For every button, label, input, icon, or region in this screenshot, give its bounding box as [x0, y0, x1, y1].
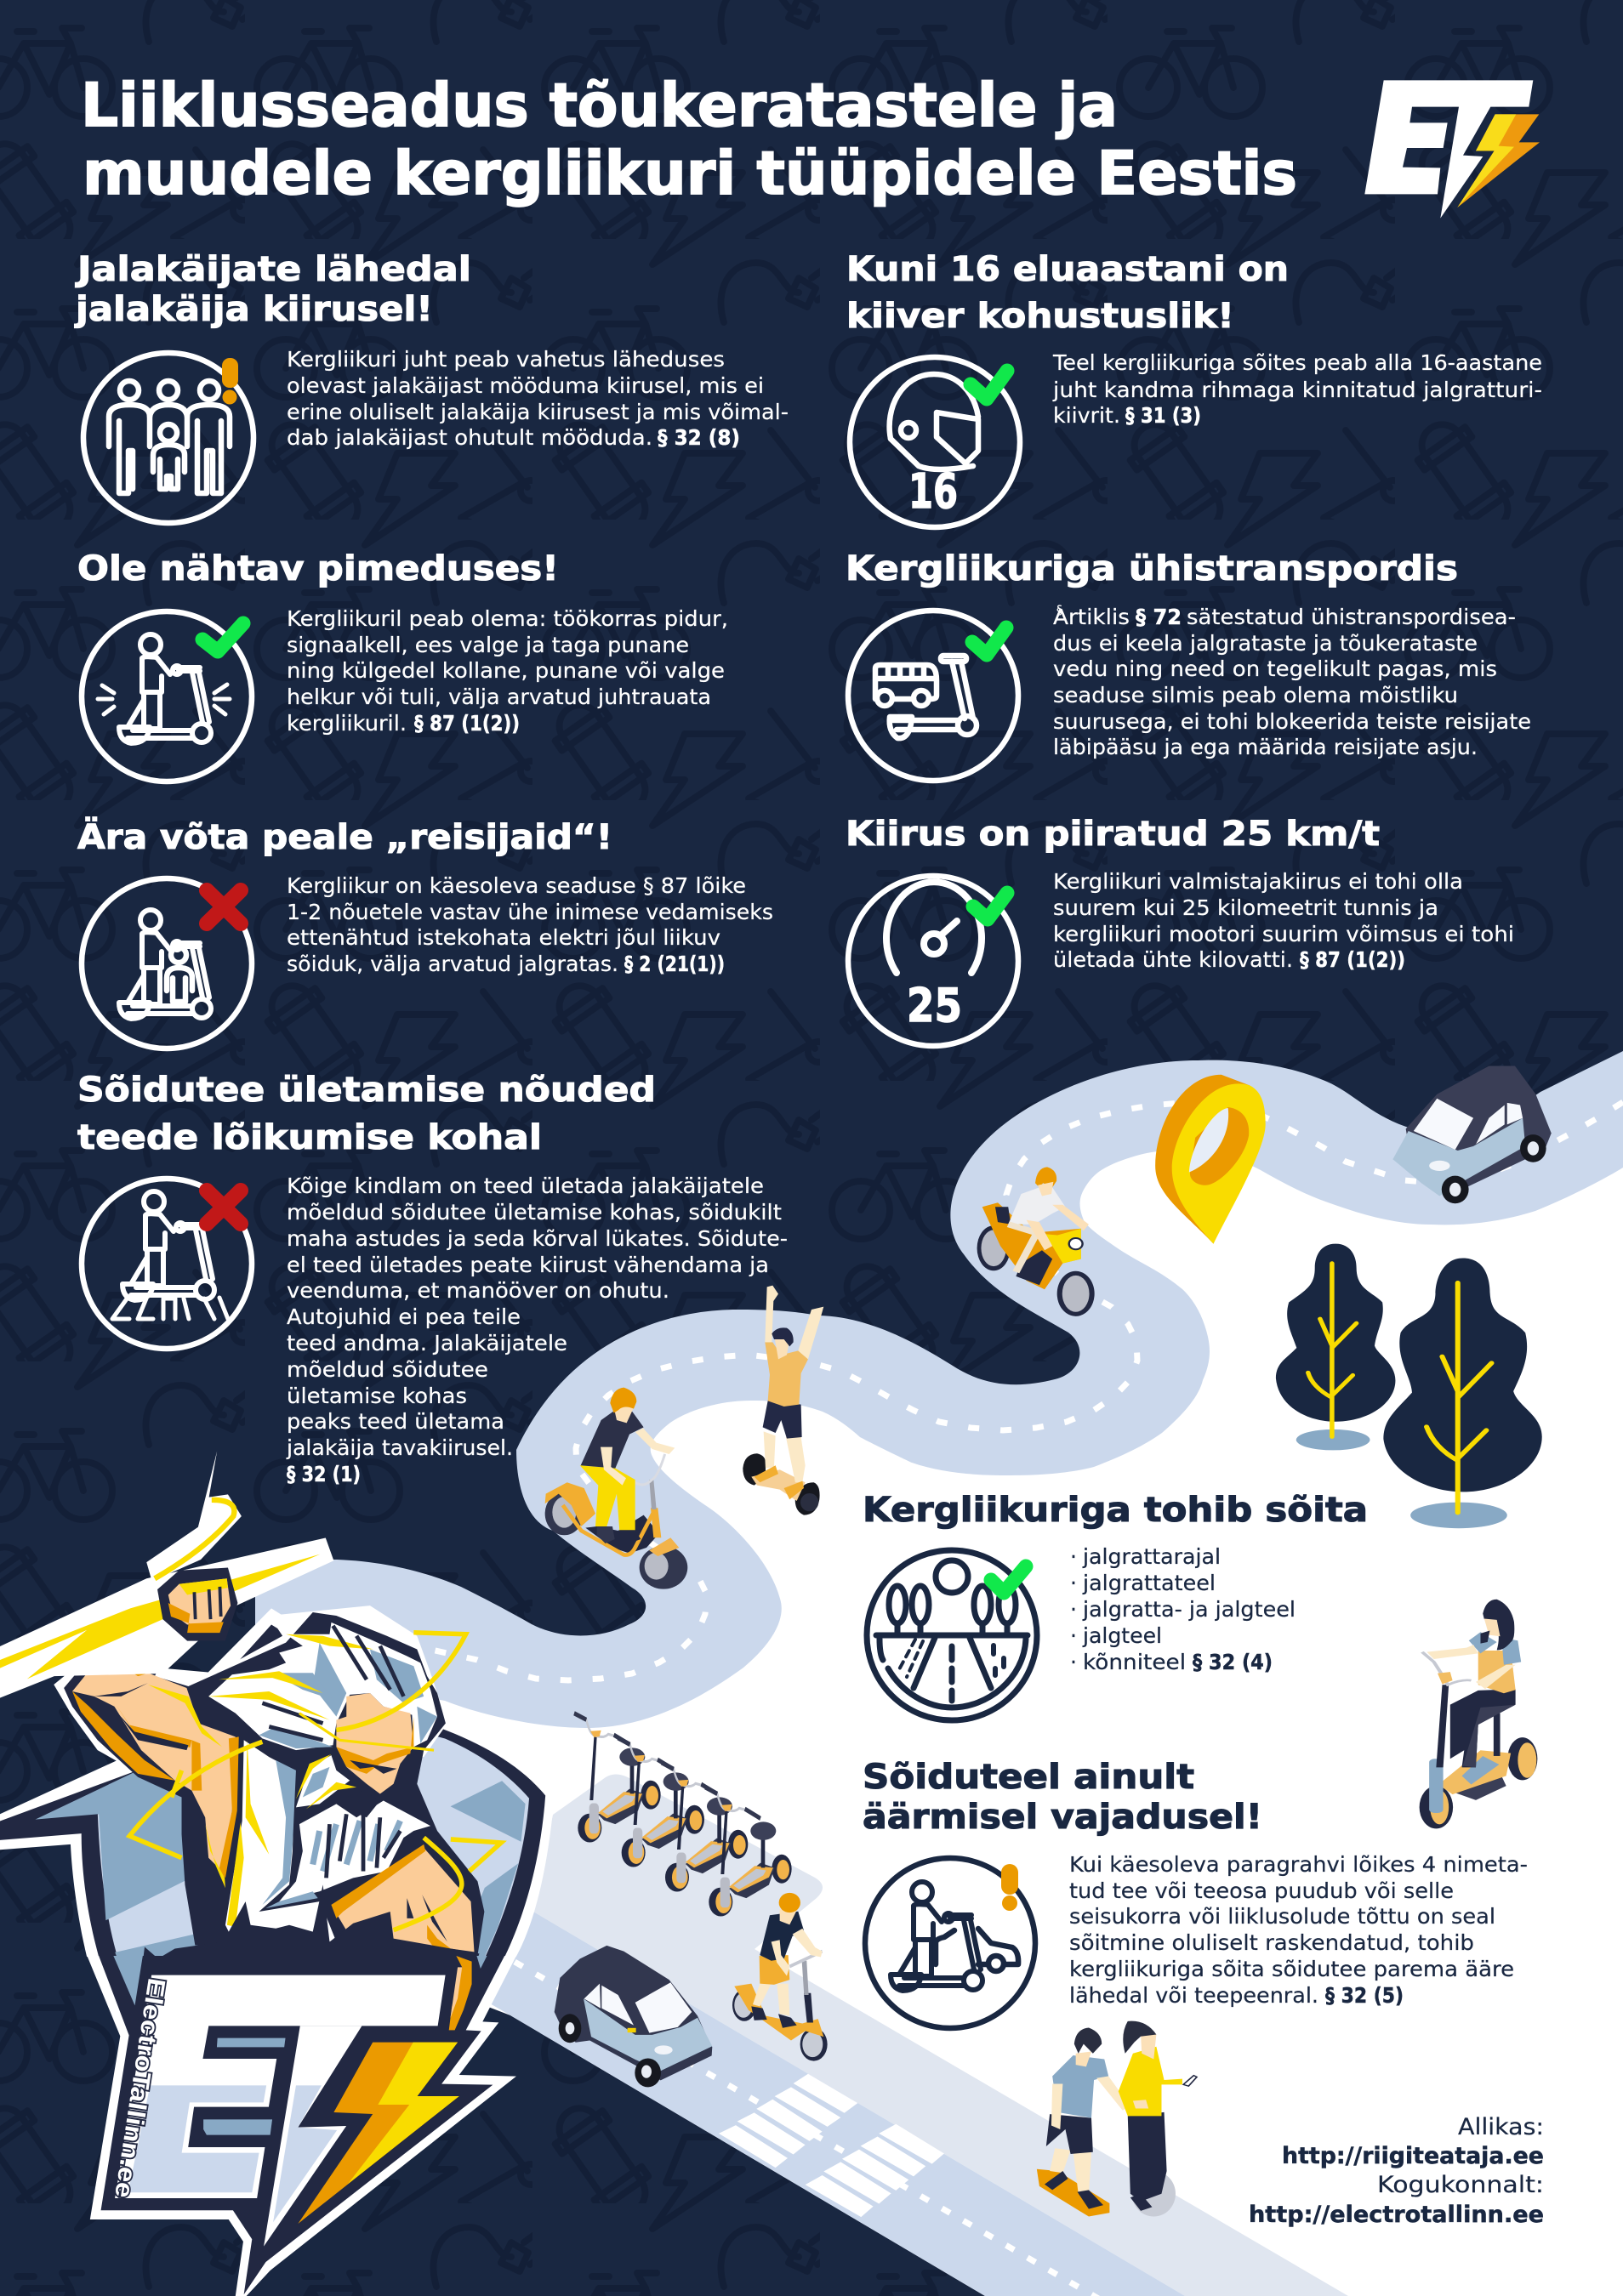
mascot: ET letters and bolt — [87, 1956, 516, 2296]
text block: sõitmine oluliselt raskendatud, tohib — [1069, 1930, 1474, 1955]
text block: Kergliikuri valmistajakiirus ei tohi olla — [1053, 869, 1463, 894]
heading — [863, 1758, 1262, 1837]
heading: Kuni 16 eluaastani on — [846, 250, 1289, 289]
illustration: top car — [1392, 1066, 1552, 1203]
mascot: brand text: ElectroTallinn.ee — [109, 1976, 170, 2200]
text block: § 2 (21(1)) — [624, 952, 725, 976]
text block: seaduse silmis peab olema mõistliku — [1053, 683, 1458, 708]
logo: ET — [1364, 80, 1540, 219]
icon: roads — [867, 1550, 1037, 1720]
text block: § 32 (5) — [1325, 1983, 1404, 2008]
list: allowed paths: kõnniteel — [1083, 1650, 1186, 1674]
text block: ületamise kohas — [287, 1384, 467, 1408]
text block: Kui käesoleva paragrahvi lõikes 4 nimeta- — [1069, 1852, 1528, 1877]
list: allowed paths: · — [1070, 1623, 1077, 1648]
illustration: man on kick scooter — [732, 1893, 828, 2061]
text block: § 31 (3) — [1125, 403, 1201, 428]
mascot: figure of Zeus — [54, 1605, 484, 1955]
icon: scooter on crossing — [82, 1179, 252, 1349]
icon: speedometer 25 — [848, 876, 1018, 1046]
illustration: moped rider — [977, 1167, 1095, 1316]
text block: § 32 (1) — [287, 1462, 361, 1486]
sources: http://riigiteataja.ee — [1282, 2143, 1544, 2169]
text block — [1069, 1852, 1528, 2008]
text block — [287, 606, 728, 736]
heading — [74, 250, 471, 329]
heading: Sõiduteel ainult — [863, 1758, 1194, 1797]
list: allowed paths: jalgrattarajal — [1082, 1544, 1221, 1569]
text block — [287, 873, 773, 976]
icon: speedometer 25: 25 — [907, 979, 962, 1032]
list: allowed paths — [1070, 1544, 1296, 1674]
mascot: city skyline — [141, 1884, 479, 2032]
text block: Autojuhid ei pea teile — [287, 1304, 521, 1329]
list: allowed paths: · — [1070, 1571, 1077, 1595]
mascot: shield — [0, 1608, 555, 2004]
icon: location pin — [1155, 1075, 1266, 1244]
text block: ettenähtud istekohata elektri jõul liikuv — [287, 925, 720, 950]
mascot: thunderbolt and fist — [0, 1451, 333, 1698]
text block: § — [1056, 604, 1062, 617]
panel: Kergliikuriga ühistranspordis — [846, 549, 1531, 781]
text block — [287, 347, 789, 450]
heading: Sõidutee ületamise nõuded — [77, 1071, 656, 1110]
illustration: parked scooters — [574, 1713, 792, 1917]
heading: äärmisel vajadusel! — [863, 1798, 1262, 1837]
illustration: hoverboard rider — [743, 1286, 823, 1515]
icon: scooter with lights — [82, 611, 252, 781]
road centre dashes — [374, 1102, 1623, 1680]
text block: läbipääsu ja ega määrida reisijate asju. — [1053, 735, 1478, 759]
icon: exclamation — [1001, 1864, 1018, 1911]
title: Liiklusseadus tõukeratastele ja — [81, 71, 1118, 140]
panel: Ära võta peale reisijaid — [77, 816, 773, 1049]
sources: http://electrotallinn.ee — [1249, 2202, 1544, 2228]
list: allowed paths: § 32 (4) — [1193, 1650, 1273, 1674]
text block: lähedal või teepeenral. — [1069, 1983, 1318, 2008]
heading: Kiirus on piiratud 25 km/t — [846, 815, 1380, 854]
text block: olevast jalakäijast mööduma kiirusel, mis ei — [287, 373, 764, 398]
text block: peaks teed ületama — [287, 1409, 504, 1434]
list: allowed paths: jalgratta- ja jalgteel — [1082, 1597, 1296, 1622]
text block: suurusega, ei tohi blokeerida teiste reisijate — [1053, 709, 1531, 734]
illustration: rider with yellow trousers — [545, 1388, 687, 1589]
panel: Sõiduteel ainult — [863, 1758, 1528, 2028]
list: allowed paths: · — [1070, 1650, 1077, 1674]
winding road — [255, 1051, 1623, 1728]
title: muudele kergliikuri tüüpidele Eestis — [83, 139, 1297, 208]
list: allowed paths: jalgrattateel — [1082, 1571, 1216, 1595]
heading: jalakäija kiirusel! — [74, 290, 433, 329]
text block: ületada ühte kilovatti. — [1053, 947, 1293, 972]
text block: Kergliikuri juht peab vahetus läheduses — [287, 347, 725, 372]
sources: Kogukonnalt: — [1377, 2172, 1544, 2198]
white ground area — [357, 1114, 1623, 2296]
icon: cross — [207, 1191, 241, 1224]
text block: § 87 (1(2)) — [1300, 947, 1405, 972]
icon: cross — [207, 890, 241, 924]
text block: mõeldud sõidutee — [287, 1357, 488, 1382]
heading: Kergliikuriga tohib sõita — [863, 1491, 1368, 1530]
text block: signaalkell, ees valge ja taga punane — [287, 633, 689, 657]
panel: Kuni 16 eluaastani — [846, 250, 1542, 527]
text block: Kergliikur on käesoleva seaduse § 87 lõike — [287, 873, 746, 898]
heading: Ole nähtav pimeduses! — [77, 549, 559, 588]
illustration: woman on seated scooter — [1420, 1600, 1537, 1828]
icon: scooter and car — [865, 1858, 1035, 2028]
text block: veenduma, et manööver on ohutu. — [287, 1278, 669, 1303]
icon: pedestrians — [83, 353, 253, 523]
text block: maha astudes ja seda kõrval lükates. Sõidute- — [287, 1226, 788, 1251]
icon: check — [973, 893, 1007, 919]
panel: Kergliikuriga tohib sõita — [863, 1491, 1368, 1720]
icon: bus and scooter — [848, 611, 1018, 781]
text block: helkur või tuli, välja arvatud juhtrauata — [287, 685, 711, 709]
text block: suurem kui 25 kilomeetrit tunnis ja — [1053, 895, 1438, 920]
text block: 1-2 nõuetele vastav ühe inimese vedamiseks — [287, 900, 773, 924]
panel: Jalakäijate lähedal — [74, 250, 789, 523]
text block: vedu ning need on tegelikult pagas, mis — [1053, 656, 1497, 681]
text block: Kõige kindlam on teed ületada jalakäijatele — [287, 1174, 764, 1198]
text block: kergliikuril. — [287, 711, 407, 736]
icon: check — [972, 628, 1006, 655]
text block: juht kandma rihmaga kinnitatud jalgratturi- — [1052, 378, 1542, 402]
text block: tud tee või teeosa puudub või selle — [1069, 1878, 1454, 1903]
icon: scooter with passenger — [82, 878, 252, 1049]
heading: Jalakäijate lähedal — [75, 250, 471, 289]
heading — [77, 1071, 656, 1157]
text block — [1052, 350, 1542, 428]
text block: teed andma. Jalakäijatele — [287, 1331, 567, 1355]
street: sidewalk — [533, 1774, 1348, 2296]
illustration: trees — [1276, 1244, 1542, 1528]
text block: kergliikuriga sõita sõidutee parema ääre — [1069, 1957, 1514, 1981]
text block: kergliikuri mootori suurim võimsus ei tohi — [1053, 922, 1514, 946]
street: carriageway — [459, 1879, 1185, 2296]
panel: Ole nähtav pimeduses — [77, 549, 728, 781]
icon: check — [991, 1566, 1026, 1593]
text block — [286, 1174, 788, 1486]
text block: Kergliikuril peab olema: töökorras pidur, — [287, 606, 728, 631]
text block: ning külgedel kollane, punane või valge — [287, 658, 725, 683]
icon: helmet 16 — [850, 357, 1020, 527]
list: allowed paths: · — [1070, 1597, 1077, 1622]
icon: helmet 16: 16 — [908, 464, 958, 520]
heading: Ära võta peale „reisijaid“! — [77, 816, 612, 857]
street dashes — [515, 1962, 1106, 2296]
icon: exclamation — [222, 358, 238, 405]
sources — [1249, 2114, 1544, 2228]
heading: kiiver kohustuslik! — [846, 297, 1234, 336]
illustration: car on street — [555, 1946, 712, 2087]
text block: el teed ületades peate kiirust vähendama ja — [287, 1253, 769, 1277]
heading: teede lõikumise kohal — [77, 1118, 542, 1157]
panel: Sõidutee ületamise nõuded — [77, 1071, 788, 1486]
text block: dus ei keela jalgrataste ja tõukerataste — [1053, 631, 1478, 656]
text block: erine oluliselt jalakäija kiirusest ja mis võimal- — [287, 400, 789, 424]
text block — [1053, 869, 1514, 972]
text block: Artiklis — [1053, 605, 1130, 629]
text block: mõeldud sõidutee ületamise kohas, sõidukilt — [287, 1200, 782, 1225]
title — [81, 71, 1297, 208]
text block: jalakäija tavakiirusel. — [286, 1435, 513, 1460]
panel: Kiirus on piiratud — [846, 815, 1514, 1046]
list: allowed paths: jalgteel — [1082, 1623, 1162, 1648]
text block: dab jalakäijast ohutult mööduda. — [287, 425, 652, 450]
text block: § 87 (1(2)) — [414, 711, 520, 736]
text block: sätestatud ühistranspordisea- — [1187, 605, 1516, 629]
crosswalk — [719, 2074, 944, 2217]
icon: check — [971, 371, 1007, 399]
heading: Kergliikuriga ühistranspordis — [846, 549, 1458, 588]
text block: Teel kergliikuriga sõites peab alla 16-aastane — [1052, 350, 1542, 375]
text block — [1053, 604, 1531, 759]
text block: seisukorra või liiklusolude tõttu on seal — [1069, 1904, 1495, 1929]
icon: check — [202, 623, 243, 651]
list: allowed paths: · — [1070, 1544, 1077, 1569]
illustration: couple with skateboard and unicycle — [1037, 2021, 1197, 2217]
text block: sõiduk, välja arvatud jalgratas. — [287, 952, 618, 976]
sources: Allikas: — [1458, 2114, 1544, 2140]
text block: § 72 — [1136, 605, 1182, 629]
text block: § 32 (8) — [658, 425, 740, 450]
heading — [846, 250, 1289, 336]
text block: kiivrit. — [1053, 403, 1120, 428]
mascot: lightning arcs — [129, 1633, 501, 1930]
